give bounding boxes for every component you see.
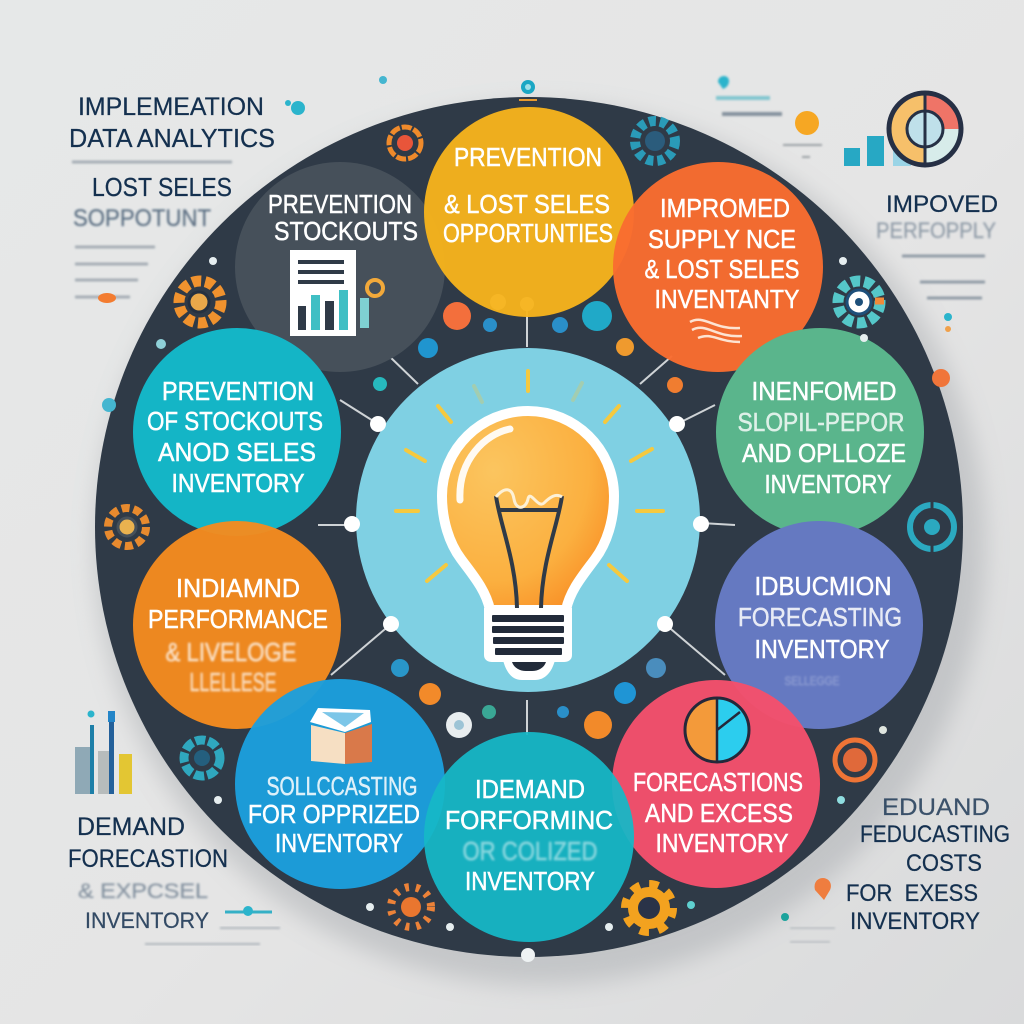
legend snippet bottom left <box>145 906 280 944</box>
icon: orange gear left <box>179 281 221 323</box>
text block: bottom right: FOR EXESS <box>846 880 978 907</box>
bubble: left orange: INDIAMND <box>176 573 300 603</box>
bubble: top right orange <box>613 162 823 372</box>
text block: top left <box>69 93 275 297</box>
text block: bottom right <box>846 794 1010 935</box>
icon: sun bottom <box>391 887 431 927</box>
bubble: right green: AND OPLLOZE <box>742 438 906 468</box>
bubble: left cyan: OF STOCKOUTS <box>147 406 323 436</box>
bubble: top left dark: PREVENTION <box>268 189 412 219</box>
icon: box <box>310 708 372 764</box>
text block: bottom right: EDUAND <box>882 794 990 821</box>
bubble: left cyan: ANOD SELES <box>158 437 316 467</box>
icon: orange badge bottom right <box>835 740 875 780</box>
connector nodes <box>344 416 709 632</box>
bubble: left cyan <box>133 328 341 536</box>
bar chart top right <box>844 136 911 166</box>
bubble: left orange: & LIVELOGE <box>166 637 296 667</box>
icon: report chart <box>290 250 383 336</box>
text block: bottom left: & EXPCSEL <box>78 880 208 903</box>
small blobs top centre <box>379 76 531 90</box>
bubble: bottom teal: OR COLIZED <box>462 836 598 866</box>
bubble: bottom left blue: INVENTORY <box>275 828 403 858</box>
text block: bottom right: COSTS <box>906 850 982 877</box>
icon: small teal blob top left <box>285 100 305 115</box>
bubble: right green: INENFOMED <box>752 376 896 406</box>
text lines: top left <box>72 162 232 297</box>
bubble: bottom teal: IDEMAND <box>475 774 585 804</box>
text block: top right: IMPOVED <box>886 191 998 218</box>
bubble: left orange <box>133 521 341 729</box>
text block: bottom left: FORECASTION <box>68 845 228 873</box>
bubble: right green: INVENTORY <box>764 469 892 499</box>
bubble: bottom left blue: FOR OPPRIZED <box>248 799 420 829</box>
legend snippet bottom right <box>781 878 835 942</box>
bubble: left orange: LLELLESE <box>190 667 276 697</box>
bubble: left cyan: INVENTORY <box>172 468 304 498</box>
icon: top pin <box>519 80 537 100</box>
bubble: top right orange: IMPROMED <box>660 193 790 223</box>
bubble: top left dark: STOCKOUTS <box>274 216 418 246</box>
text lines: top right <box>902 256 985 298</box>
bubble: bottom left blue <box>235 679 445 889</box>
bubble: bottom teal: FORFORMINC <box>445 805 613 835</box>
text block: bottom left: DEMAND <box>77 813 185 841</box>
bubble: top right orange: & LOST SELES <box>644 254 800 284</box>
light rays <box>396 371 663 581</box>
legend snippets top right <box>716 76 822 157</box>
icon: teal target right <box>910 500 954 552</box>
icon: ring orange top <box>389 127 421 159</box>
icon: light bulb <box>442 411 614 680</box>
bubble: top amber: & LOST SELES <box>444 189 610 219</box>
bubble: right blue: FORECASTING <box>738 602 902 632</box>
small ring dots <box>102 257 950 962</box>
text block: bottom right: INVENTORY <box>850 908 980 935</box>
bubble: right green <box>716 328 924 536</box>
bubble: top right orange: SUPPLY NCE <box>648 224 796 254</box>
bubble: right blue: SELLEGGE <box>784 674 840 688</box>
bubble: right green: SLOPIL-PEPOR <box>738 407 904 437</box>
decorative dots inner ring <box>373 294 683 739</box>
bubble: bottom right pink <box>612 680 820 888</box>
bubble: top amber: PREVENTION <box>454 142 602 172</box>
bubble: left orange: PERFORMANCE <box>148 604 328 634</box>
text block: top right: PERFOPPLY <box>876 218 996 243</box>
icon: bar chart bottom left <box>75 710 132 794</box>
icon: teal gear bottom left <box>184 740 220 776</box>
text block: top left: SOPPOTUNT <box>73 205 211 232</box>
panel: centre circle <box>356 348 700 692</box>
icon: waves <box>690 320 742 342</box>
bubble: top left dark <box>235 162 445 372</box>
bubble: left cyan: PREVENTION <box>162 376 314 406</box>
text block: top left: DATA ANALYTICS <box>69 123 275 153</box>
icon: orange coin <box>795 111 819 135</box>
text block: top left: LOST SELES <box>92 172 232 202</box>
icon: teal gear right <box>838 281 884 323</box>
icon: orange gear far left <box>108 508 146 546</box>
bubble: top amber: OPPORTUNTIES <box>443 218 613 248</box>
bubble: bottom right pink: FORECASTIONS <box>633 767 803 797</box>
marker: orange dot <box>98 293 116 303</box>
icon: gear teal top <box>635 121 675 161</box>
bubble: bottom teal: INVENTORY <box>465 866 595 896</box>
bubble: bottom teal <box>424 732 634 942</box>
icon: pie chart top right <box>889 93 961 165</box>
connector lines <box>318 300 735 735</box>
text block: bottom left: INVENTORY <box>85 908 209 933</box>
main dark circle <box>95 97 963 957</box>
bubble: right blue: INVENTORY <box>754 634 890 664</box>
bubble: bottom right pink: INVENTORY <box>656 828 788 858</box>
bubble: right blue <box>715 521 923 729</box>
text block: bottom left <box>68 813 228 933</box>
text block: top left: IMPLEMEATION <box>78 93 264 121</box>
icon: yellow gear bottom <box>625 884 673 932</box>
bubble: right blue: IDBUCMION <box>754 571 892 601</box>
markers: tiny pins <box>944 313 952 332</box>
text block: top right <box>876 191 998 298</box>
bubble: bottom right pink: AND EXCESS <box>645 798 793 828</box>
bubble: bottom left blue: SOLLCCASTING <box>266 771 418 801</box>
bubble: top right orange: INVENTANTY <box>654 284 800 314</box>
bubble: top amber <box>424 107 634 317</box>
icon: pie <box>685 698 749 762</box>
